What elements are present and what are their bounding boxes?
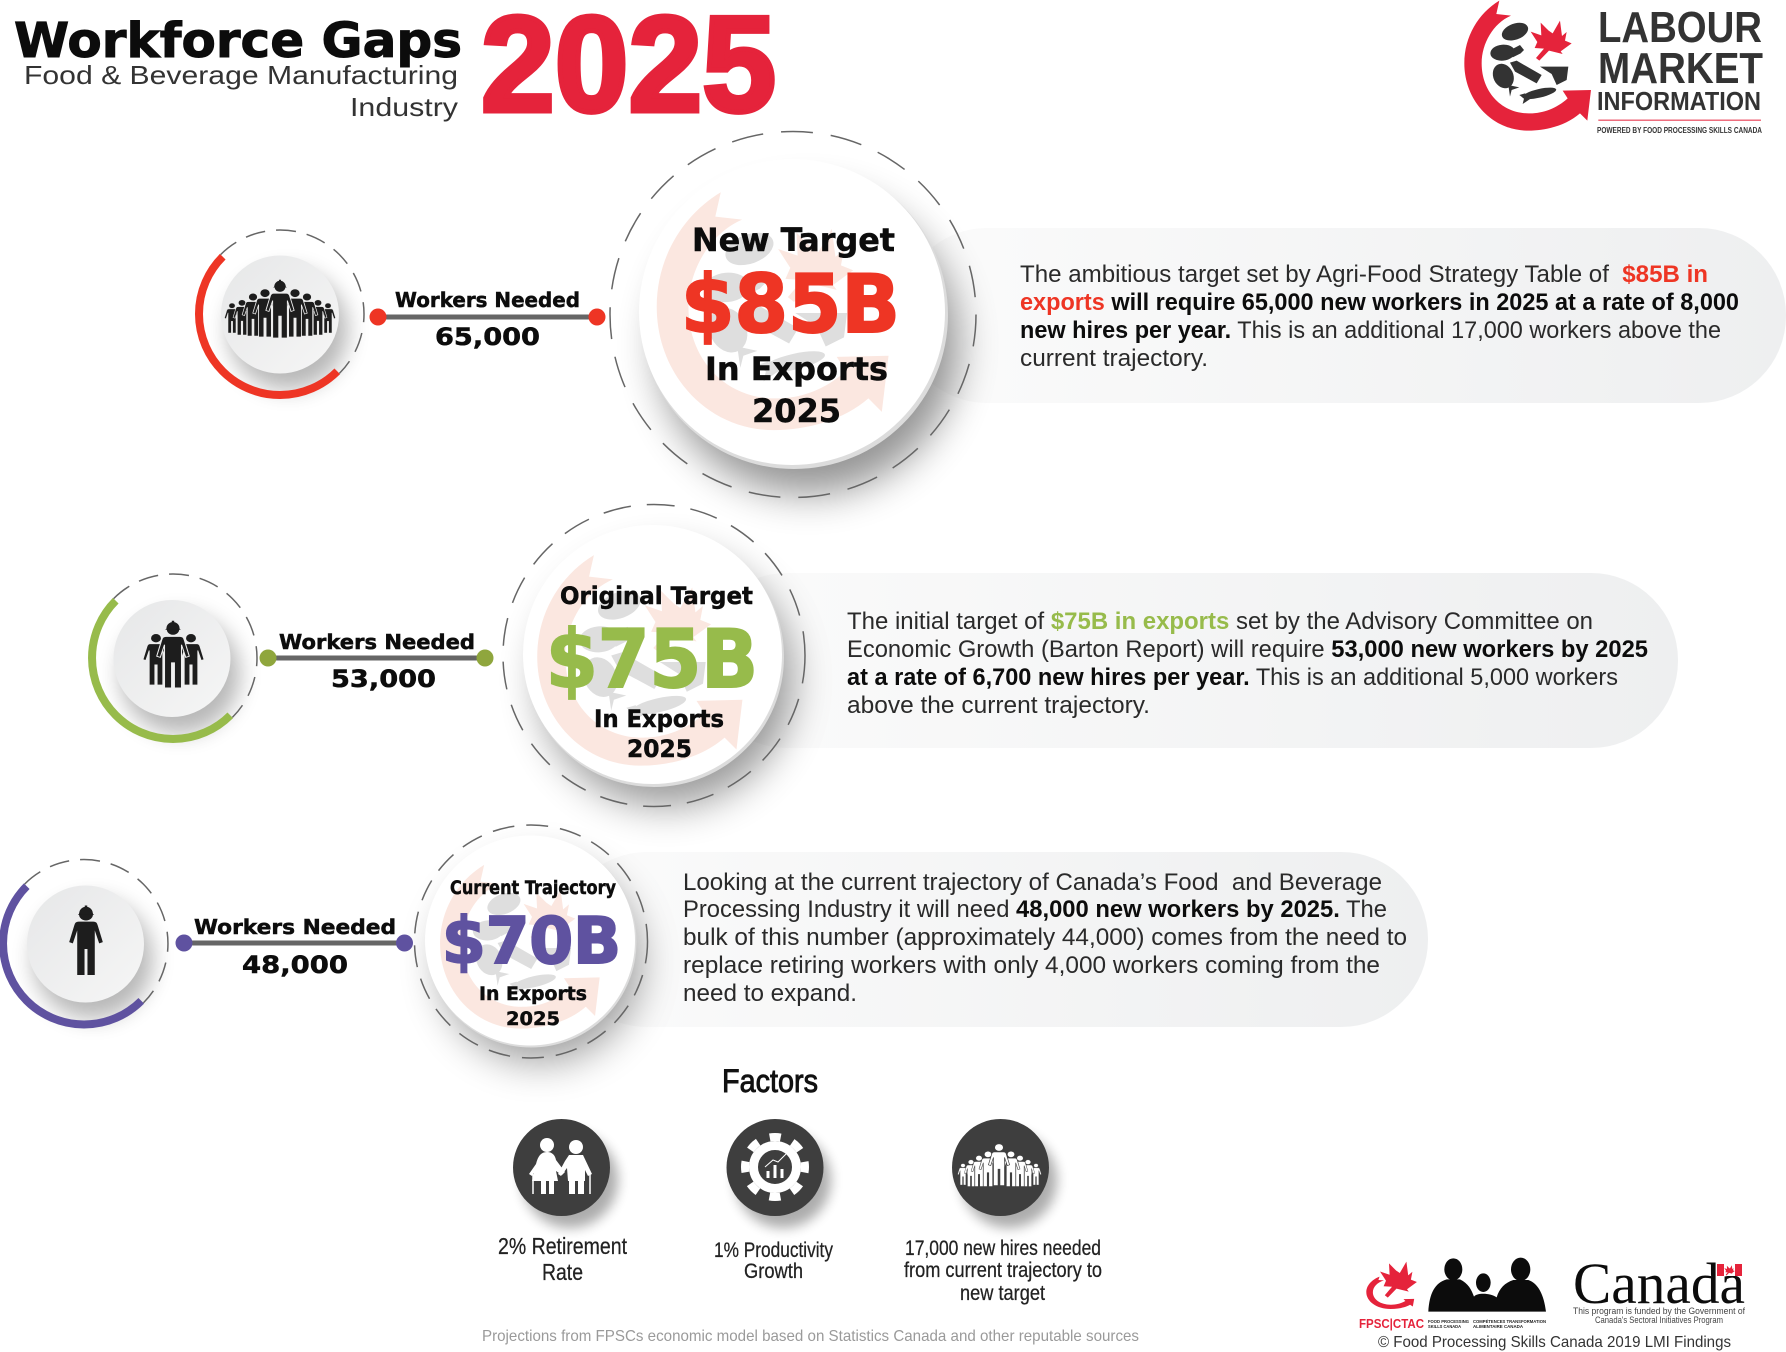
heading: Factors: Factors (722, 1063, 818, 1099)
label: 2% Retirement Rate: Rate (542, 1259, 583, 1285)
text: new target description: current trajectory. (1020, 345, 1208, 372)
label: 17,000 new hires: new target (960, 1282, 1045, 1305)
logo wordmark (1597, 3, 1763, 135)
logo: FPSC CTAC: FPSC|CTAC (1359, 1316, 1425, 1331)
label: 2% Retirement Rate: 2% Retirement (498, 1233, 628, 1259)
copyright: © Food Processing Skills Canada 2019 LMI Findings (1378, 1334, 1731, 1351)
label: In Exports 2025: In Exports (705, 350, 888, 388)
connector: workers needed 53,000 (260, 630, 494, 693)
text: original target description: above the current trajectory. (847, 692, 1150, 719)
connector: workers needed 48,000: 48,000 (242, 951, 348, 979)
text: current trajectory description: replace retiring workers with only 4,000 workers coming from the (683, 952, 1380, 979)
badge: original target $75B (503, 504, 805, 806)
label: In Exports 2025: 2025 (752, 392, 841, 430)
connector: workers needed 53,000: 53,000 (331, 665, 436, 693)
icon: three workers (143, 621, 204, 688)
value: $85B: $85B (681, 258, 900, 351)
logo: FPSC CTAC: FOOD PROCESSING (1428, 1319, 1469, 1324)
connector: workers needed 53,000: Workers Needed (279, 630, 475, 654)
text: original target description (847, 608, 1648, 719)
badge: current trajectory $70B (414, 825, 648, 1062)
subtitle: Food and Beverage Manufacturing Industry: Industry (350, 92, 458, 122)
logo: FPSC CTAC: COMPÉTENCES TRANSFORMATION (1473, 1317, 1546, 1324)
logo: Canada wordmark: Canada (1573, 1251, 1745, 1316)
icon: logo foods (1489, 19, 1568, 104)
heading: Current Trajectory: Current Trajectory (450, 877, 617, 899)
connector: workers needed 65,000 (370, 288, 606, 351)
text: new target description: new hires per year. This is an additional 17,000 workers above the (1020, 317, 1721, 344)
logo: FPSC CTAC: SKILLS CANADA (1428, 1324, 1462, 1329)
watermark: logo (440, 865, 600, 1029)
factor: productivity growth (726, 1119, 831, 1228)
panel: original target description (700, 573, 1678, 748)
text: current trajectory description: Processing Industry it will need 48,000 new workers by 2025. The (683, 896, 1387, 923)
label: 1% Productivity Growth: Growth (744, 1260, 803, 1283)
heading: Original Target: Original Target (560, 582, 753, 610)
icon: gear with chart (745, 1137, 805, 1197)
label: 1% Productivity Growth (714, 1239, 833, 1283)
heading: New Target: New Target (692, 221, 895, 259)
connector: workers needed 48,000 (176, 915, 413, 979)
logo: FPSC CTAC (1359, 1258, 1546, 1331)
text: new target description (1020, 261, 1739, 372)
label: In Exports 2025: In Exports (479, 983, 587, 1005)
label: 17,000 new hires (904, 1237, 1102, 1305)
text: current trajectory description (683, 869, 1407, 1007)
icon: elderly couple (529, 1138, 592, 1194)
source note: Projections from FPSCs economic model based on Statistics Canada and other reputable sources (482, 1328, 1139, 1345)
panel: current trajectory description (560, 852, 1428, 1027)
text: original target description: The initial target of $75B in exports set by the Advisory Committee on (847, 608, 1593, 635)
text: original target description: Economic Growth (Barton Report) will require 53,000 new workers by 2025 (847, 636, 1648, 663)
icon: family silhouette (1428, 1258, 1546, 1312)
subtitle: Food and Beverage Manufacturing Industry: Food & Beverage Manufacturing (24, 60, 458, 90)
title: Workforce Gaps: Workforce Gaps (14, 13, 462, 69)
label: 2% Retirement Rate (498, 1233, 628, 1285)
label: In Exports 2025 (594, 705, 724, 763)
label: 17,000 new hires: from current trajectory to (904, 1259, 1102, 1282)
logo: FPSC CTAC: ALIMENTAIRE CANADA (1473, 1324, 1524, 1329)
factor: new hires (952, 1119, 1057, 1228)
label: In Exports 2025 (705, 350, 888, 430)
badge: new target $85B (610, 132, 976, 498)
label: In Exports 2025: 2025 (627, 735, 692, 763)
label: 1% Productivity Growth: 1% Productivity (714, 1239, 833, 1262)
logo: Canada wordmark: This program is funded by the Government of (1573, 1306, 1745, 1316)
text: current trajectory description: bulk of this number (approximately 44,000) comes from the need to (683, 924, 1407, 951)
subtitle: Food and Beverage Manufacturing Industry (24, 60, 458, 122)
icon: crowd (958, 1144, 1041, 1186)
connector: workers needed 65,000: Workers Needed (395, 288, 580, 312)
icon: crowd of workers (224, 280, 336, 338)
text: new target description: exports will require 65,000 new workers in 2025 at a rate of 8,000 (1020, 289, 1739, 316)
panel: new target description (900, 228, 1786, 403)
factor: retirement rate (513, 1119, 618, 1228)
text: current trajectory description: need to expand. (683, 980, 857, 1007)
icon: Canadian flag (1717, 1264, 1742, 1276)
text: original target description: at a rate of 6,700 new hires per year. This is an additional 5,000 workers (847, 664, 1618, 691)
logo: Canada wordmark: Canada's Sectoral Initiatives Program (1595, 1315, 1723, 1325)
connector: workers needed 65,000: 65,000 (435, 323, 540, 351)
icon: logo maple leaf (1531, 21, 1572, 61)
node: 65,000 workers crowd icon (199, 230, 364, 395)
icon: logo arrow (1464, 1, 1591, 131)
value: $75B: $75B (546, 613, 758, 706)
label: In Exports 2025: In Exports (594, 705, 724, 733)
watermark: logo (657, 192, 889, 430)
label: In Exports 2025 (479, 983, 587, 1030)
text: current trajectory description: Looking at the current trajectory of Canada’s Food and Beverage (683, 869, 1382, 896)
label: 17,000 new hires: 17,000 new hires needed (905, 1237, 1101, 1260)
icon: single worker (69, 906, 103, 975)
logo: Labour Market Information (1464, 1, 1761, 131)
connector: workers needed 48,000: Workers Needed (194, 915, 396, 939)
node: 48,000 workers icon (3, 860, 168, 1024)
text: new target description: The ambitious target set by Agri-Food Strategy Table of $85B in (1020, 261, 1708, 288)
logo wordmark: MARKET (1598, 44, 1763, 93)
logo wordmark: LABOUR (1598, 3, 1762, 52)
node: 53,000 workers icon (92, 574, 257, 739)
label: In Exports 2025: 2025 (506, 1008, 560, 1030)
value: $70B: $70B (442, 905, 621, 979)
watermark: logo (537, 555, 742, 766)
logo wordmark: INFORMATION (1597, 86, 1761, 116)
